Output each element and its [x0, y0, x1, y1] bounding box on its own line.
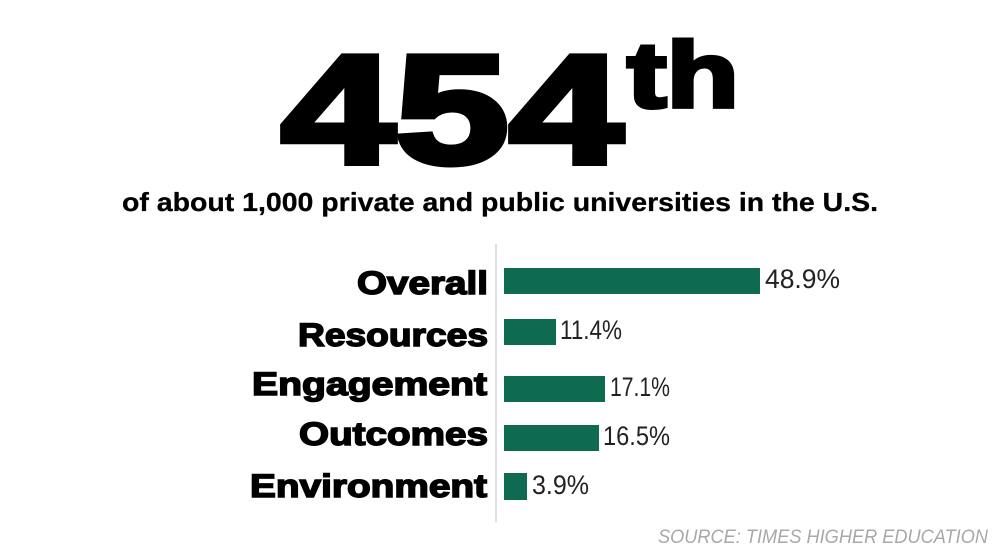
row: Overall: 48.9% [765, 264, 840, 294]
row: Outcomes [299, 416, 670, 452]
row: Environment: 3.9% [532, 470, 589, 500]
row: Outcomes: 16.5% [603, 421, 670, 451]
bar chart [250, 264, 840, 504]
subtitle: of about 1,000 private and public universities in the U.S. [122, 187, 878, 217]
vertical axis [495, 244, 497, 522]
row: Environment [250, 468, 589, 504]
row: Engagement: 17.1% [610, 372, 670, 402]
row: Engagement: Engagement [252, 366, 487, 402]
row: Environment: Environment [250, 468, 487, 504]
row: Engagement [252, 366, 670, 402]
rank number: 454 [281, 23, 623, 196]
row: Overall: Overall [357, 265, 488, 301]
ordinal suffix: th [627, 23, 739, 127]
row: Outcomes: Outcomes [299, 416, 488, 452]
row: Resources: Resources [298, 317, 488, 353]
row: Overall [357, 264, 840, 301]
row: Resources [298, 315, 622, 353]
source note: SOURCE: TIMES HIGHER EDUCATION [658, 527, 988, 548]
headline rank: 454th [281, 23, 739, 196]
row: Resources: 11.4% [560, 315, 622, 345]
